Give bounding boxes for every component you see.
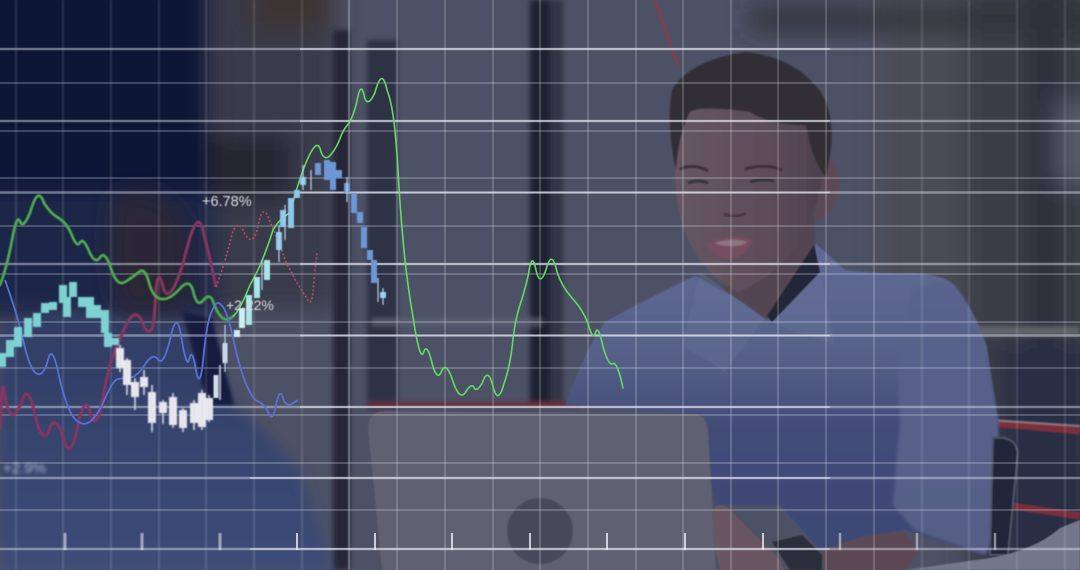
- red table rails: [990, 420, 1080, 516]
- candlestick chart, lower left: [2, 282, 220, 432]
- chair back: [990, 438, 1018, 555]
- hand, watch and forearm: [713, 505, 1080, 570]
- foreground person silhouette, left: [0, 192, 332, 570]
- shirt collar: [682, 272, 765, 372]
- red line chart: [0, 222, 216, 448]
- laptop logo: [507, 498, 573, 564]
- label: +2.22%: +2.22%: [226, 297, 274, 313]
- red ceiling line: [655, 0, 678, 66]
- red dashed line: [216, 212, 317, 302]
- laptop: [368, 411, 716, 570]
- mouth: [707, 237, 753, 259]
- shirt: [565, 243, 998, 555]
- axis ticks: [65, 533, 995, 550]
- blue line chart: [5, 280, 298, 424]
- nose shadow: [724, 213, 746, 216]
- label: +2.9%: +2.9%: [3, 460, 46, 477]
- neck: [705, 215, 815, 320]
- man at laptop: [565, 52, 998, 555]
- face: [675, 100, 826, 292]
- ear: [815, 162, 840, 222]
- hair: [670, 52, 832, 178]
- candlestick chart, upper: [216, 160, 383, 398]
- right sleeve: [893, 282, 998, 555]
- green line chart: [0, 79, 623, 396]
- label: +6.78%: +6.78%: [202, 194, 252, 210]
- eyes and brows: [680, 166, 782, 183]
